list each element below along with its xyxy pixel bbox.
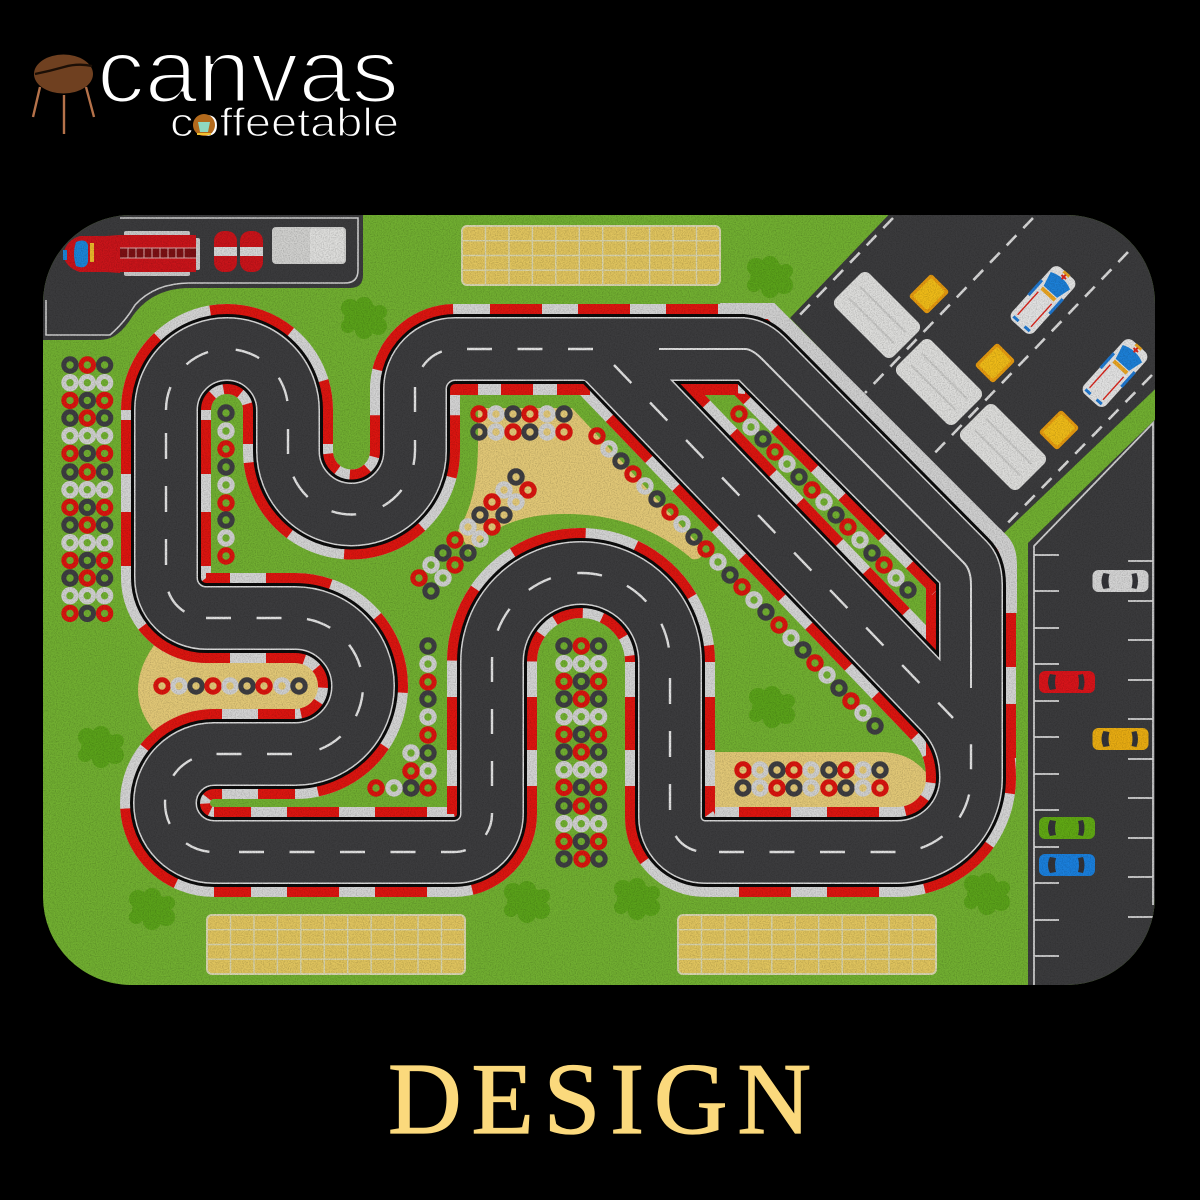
grey container [272, 227, 346, 264]
tyres: inner loop column [220, 407, 232, 562]
tyres: diagonal cluster [413, 471, 534, 597]
road: parking lot [1028, 420, 1155, 985]
tyres: long diagonal line [591, 430, 881, 732]
asphalt [165, 349, 971, 852]
logo [33, 22, 399, 145]
kerb [165, 349, 971, 852]
race track [165, 311, 1009, 852]
asphalt edge white [165, 349, 971, 852]
fabric texture [43, 215, 1155, 985]
kerb: light outer edge of the diagonal [720, 311, 1009, 613]
road: top left garage [43, 215, 363, 340]
tyres: left block [64, 359, 111, 620]
centre dashes [165, 349, 971, 852]
panel: race track board [30, 200, 1170, 1000]
tyres: island diagonal [733, 408, 914, 596]
logo sub wordmark: coffeetable [170, 101, 399, 145]
white barriers [831, 269, 1049, 493]
kerb: inner edge under top straight [478, 384, 593, 395]
car: orange [1092, 728, 1148, 750]
ambulances [1008, 263, 1150, 410]
car: red [1039, 671, 1095, 693]
solid line on upper diagonal [659, 349, 971, 688]
kerb: inner red blocks [450, 384, 738, 395]
tyres: lower column and corner [370, 640, 434, 794]
grandstand: bottom right [678, 915, 936, 974]
logo wordmark: canvas [97, 22, 399, 122]
fire truck [63, 231, 200, 276]
car: white [1092, 570, 1148, 592]
car: green [1039, 817, 1095, 839]
sand areas [138, 408, 930, 825]
grandstand: top [462, 226, 720, 285]
tyres: bottom right sand rows [737, 764, 886, 794]
tyres: centre block [558, 640, 605, 865]
tyres: top sand rows [473, 408, 570, 438]
tyres: left sand pocket [156, 680, 305, 692]
icon: coffee bean table [33, 54, 94, 134]
fire tanks [214, 231, 263, 272]
icon: coffee cup [193, 114, 215, 136]
grass ground [43, 215, 1155, 985]
asphalt edge black [165, 349, 971, 852]
bushes [78, 256, 1010, 930]
road: top right ambulance area [790, 205, 1170, 535]
title: DESIGN [388, 1043, 811, 1156]
grandstand: bottom left [207, 915, 465, 974]
orange pads [908, 273, 1080, 451]
car: blue [1039, 854, 1095, 876]
